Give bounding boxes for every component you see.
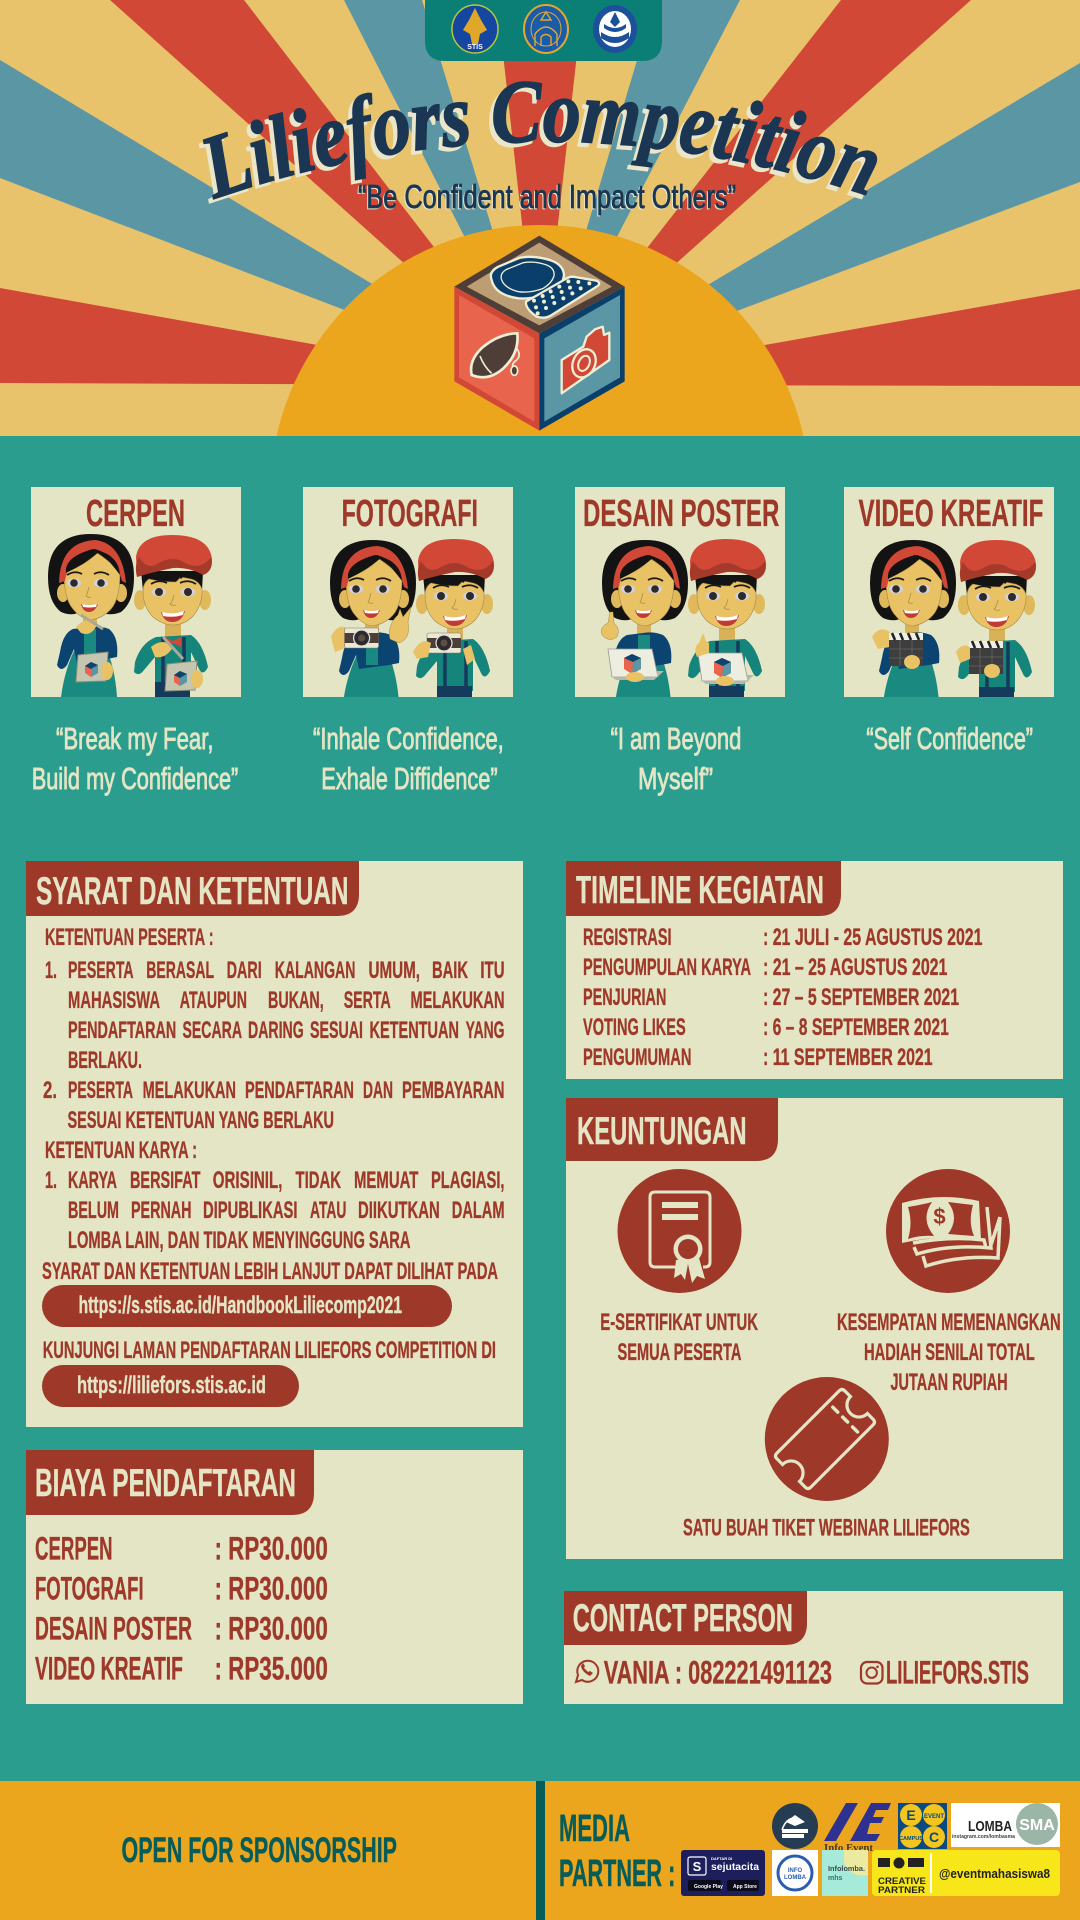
heading tab: timeline <box>566 861 841 916</box>
text block: ketentuan karya: MEMUAT <box>354 1167 418 1194</box>
text block: ketentuan karya: LOMBA LAIN, DAN TIDAK MENYINGGUNG SARA <box>68 1227 411 1254</box>
panel: contact person <box>564 1591 1063 1704</box>
link pill: handbook <box>42 1285 452 1327</box>
timeline table: VOTING LIKES <box>583 1014 686 1041</box>
text block: ketentuan karya <box>45 1137 504 1254</box>
logo: infolomba mhs: Infolomba. <box>828 1866 865 1873</box>
quote: desain poster: “I am Beyond <box>611 721 741 756</box>
text block: ketentuan peserta: BERLAKU. <box>68 1047 142 1074</box>
illustration: photographers <box>330 539 494 697</box>
logo: infolomba mhs <box>822 1850 868 1896</box>
text block: ketentuan peserta: 1. <box>45 957 57 984</box>
logo: creative partner <box>872 1850 1060 1896</box>
logo: creative partner: CREATIVE <box>878 1876 926 1887</box>
heading: cerpen: CERPEN <box>86 493 185 535</box>
panel: cerpen card <box>31 487 241 698</box>
text block: ketentuan peserta: SERTA <box>344 987 391 1014</box>
timeline table: : 27 – 5 SEPTEMBER 2021 <box>763 984 959 1011</box>
panel: timeline kegiatan <box>566 861 1063 1079</box>
logo: info lomba: INFO <box>788 1868 802 1874</box>
heading tab: biaya pendaftaran <box>26 1450 314 1515</box>
timeline table <box>583 924 982 1071</box>
text block: ketentuan peserta: DARI <box>227 957 262 984</box>
heading tab: timeline: TIMELINE KEGIATAN <box>576 869 824 912</box>
text: e-sertifikat: SEMUA PESERTA <box>618 1339 742 1366</box>
text: sponsorship: OPEN FOR SPONSORSHIP <box>122 1830 397 1870</box>
timeline table: : 11 SEPTEMBER 2021 <box>763 1044 933 1071</box>
text block: ketentuan karya: ATAU <box>310 1197 346 1224</box>
text block: ketentuan peserta: DAN <box>363 1077 393 1104</box>
text block: ketentuan peserta: KALANGAN <box>275 957 355 984</box>
title: Liliefors Competition <box>198 81 878 204</box>
timeline table: REGISTRASI <box>583 924 672 951</box>
logo: sejutacita: Google Play <box>694 1884 723 1890</box>
icon: money: $ <box>933 1204 946 1229</box>
text block: ketentuan karya: KARYA <box>68 1167 117 1194</box>
heading tab: biaya pendaftaran: BIAYA PENDAFTARAN <box>35 1462 296 1505</box>
text block: ketentuan peserta: PENDAFTARAN <box>68 1017 176 1044</box>
panel: syarat dan ketentuan <box>26 861 523 1427</box>
quote: fotografi <box>313 721 504 796</box>
logo: event campus: C <box>929 1829 939 1845</box>
quote: cerpen: “Break my Fear, <box>56 721 214 756</box>
quote: fotografi: “Inhale Confidence, <box>313 721 504 756</box>
panel: video kreatif card <box>844 487 1054 703</box>
text block: ketentuan karya: KETENTUAN KARYA : <box>45 1137 197 1164</box>
quote: fotografi: Exhale Diffidence” <box>321 761 498 796</box>
fee table: CERPEN <box>35 1530 113 1566</box>
text block: ketentuan peserta: DARING <box>248 1017 304 1044</box>
text block: ketentuan karya: ORISINIL, <box>213 1167 282 1194</box>
text: media partner: MEDIA <box>559 1808 630 1850</box>
logo: info lomba <box>772 1850 818 1896</box>
logo: creative partner: @eventmahasiswa8 <box>939 1866 1050 1881</box>
logo: info lomba beasiswa <box>772 1803 818 1849</box>
logo: event campus: E <box>906 1807 916 1823</box>
text: e-sertifikat: E-SERTIFIKAT UNTUK <box>600 1309 758 1336</box>
text block: ketentuan karya: BELUM <box>68 1197 119 1224</box>
logo: event campus <box>898 1803 947 1849</box>
logo: STIS <box>452 5 498 53</box>
logo: lomba sma: SMA <box>1019 1817 1055 1834</box>
text block: ketentuan karya: PLAGIASI, <box>431 1167 504 1194</box>
text block: ketentuan peserta: PEMBAYARAN <box>402 1077 504 1104</box>
panel: fotografi card <box>303 487 513 703</box>
text block: ketentuan peserta: BUKAN, <box>268 987 324 1014</box>
logo: media emblem <box>593 5 637 53</box>
timeline table: PENGUMUMAN <box>583 1044 692 1071</box>
logo: sejutacita <box>681 1850 765 1896</box>
quote: desain poster <box>611 721 741 796</box>
illustration: writers <box>48 534 212 697</box>
header sunburst <box>0 0 1080 436</box>
illustration: videographers <box>870 540 1036 697</box>
text: handbook note: SYARAT DAN KETENTUAN LEBIH LANJUT DAPAT DILIHAT PADA <box>42 1258 498 1285</box>
text block: ketentuan peserta: UMUM, <box>368 957 420 984</box>
text block: ketentuan peserta: MELAKUKAN <box>410 987 504 1014</box>
text: media partner: PARTNER : <box>559 1853 675 1895</box>
logo bar <box>425 0 662 61</box>
icon: instagram <box>861 1662 882 1684</box>
text block: ketentuan peserta: PESERTA <box>68 1077 133 1104</box>
fee table <box>35 1530 328 1686</box>
text block: ketentuan peserta: BAIK <box>432 957 468 984</box>
logo: campus emblem <box>524 5 568 53</box>
logo: info lomba: LOMBA <box>784 1875 807 1881</box>
text block: ketentuan karya: DALAM <box>452 1197 504 1224</box>
text block: ketentuan peserta <box>43 924 504 1134</box>
icon: whatsapp <box>576 1661 598 1682</box>
link pill: registration: https://liliefors.stis.ac.id <box>77 1372 266 1399</box>
heading tab: syarat dan ketentuan: SYARAT DAN KETENTUAN <box>36 870 348 913</box>
panel: biaya pendaftaran <box>26 1450 523 1704</box>
link pill: handbook: https://s.stis.ac.id/HandbookLiliecomp2021 <box>78 1292 402 1319</box>
heading: fotografi: FOTOGRAFI <box>342 493 478 535</box>
quote: cerpen: Build my Confidence” <box>32 761 238 796</box>
logo: STIS: STIS <box>467 44 483 51</box>
heading tab: keuntungan <box>566 1098 778 1161</box>
heading tab: syarat dan ketentuan <box>26 861 359 916</box>
logo: sejutacita: S <box>693 1859 702 1874</box>
tagline: “Be Confident and Impact Others” <box>358 178 736 215</box>
logo: lomba sma: instagram.com/lombasma <box>952 1834 1015 1840</box>
text block: ketentuan peserta: MAHASISWA <box>68 987 160 1014</box>
logo: event campus: CAMPUS <box>899 1836 923 1842</box>
text: contact phone: VANIA : 082221491123 <box>604 1654 832 1690</box>
quote: cerpen <box>32 721 238 796</box>
heading: desain poster: DESAIN POSTER <box>583 493 779 535</box>
fee table: : RP30.000 <box>214 1610 328 1646</box>
illustration: designers <box>601 539 766 697</box>
icon: ticket <box>765 1377 889 1501</box>
icon: certificate <box>618 1169 742 1293</box>
logo: info event <box>824 1803 891 1854</box>
text block: ketentuan karya: DIIKUTKAN <box>358 1197 440 1224</box>
text block: ketentuan peserta: KETENTUAN <box>370 1017 459 1044</box>
icon: cube <box>454 236 625 431</box>
panel: desain poster card <box>575 487 785 703</box>
logo: event campus: EVENT <box>924 1814 944 1820</box>
text block: ketentuan peserta: SESUAI <box>310 1017 363 1044</box>
text block: ketentuan peserta: SESUAI KETENTUAN YANG BERLAKU <box>68 1107 334 1134</box>
heading tab: keuntungan: KEUNTUNGAN <box>577 1110 747 1153</box>
text: hadiah <box>837 1309 1061 1396</box>
fee table: VIDEO KREATIF <box>35 1650 183 1686</box>
logo: info event: Info Event <box>824 1843 874 1854</box>
fee table: DESAIN POSTER <box>35 1610 192 1646</box>
text: registration note: KUNJUNGI LAMAN PENDAFTARAN LILIEFORS COMPETITION DI <box>43 1337 496 1364</box>
footer band <box>0 1781 1080 1920</box>
timeline table: : 6 – 8 SEPTEMBER 2021 <box>763 1014 949 1041</box>
logo: creative partner: PARTNER <box>878 1885 925 1896</box>
fee table: : RP30.000 <box>214 1530 328 1566</box>
text: media partner <box>559 1808 675 1895</box>
quote: desain poster: Myself” <box>638 761 713 796</box>
text block: ketentuan peserta: PENDAFTARAN <box>245 1077 354 1104</box>
logo: sejutacita: App Store <box>733 1884 757 1890</box>
timeline table: PENGUMPULAN KARYA <box>583 954 751 981</box>
text block: ketentuan peserta: PESERTA <box>68 957 134 984</box>
text block: ketentuan peserta: MELAKUKAN <box>143 1077 236 1104</box>
text block: ketentuan peserta: KETENTUAN PESERTA : <box>45 924 214 951</box>
logo: sejutacita: DAFTAR DI <box>711 1856 732 1861</box>
text block: ketentuan peserta: 2. <box>43 1077 57 1104</box>
heading tab: contact person: CONTACT PERSON <box>573 1597 793 1640</box>
text block: ketentuan karya: 1. <box>45 1167 57 1194</box>
fee table: : RP30.000 <box>214 1570 328 1606</box>
text block: ketentuan peserta: ITU <box>480 957 504 984</box>
text block: ketentuan peserta: BERASAL <box>146 957 214 984</box>
panel: keuntungan <box>566 1098 1063 1559</box>
fee table: FOTOGRAFI <box>35 1570 144 1606</box>
heading tab: contact person <box>564 1591 807 1645</box>
icon: money <box>886 1169 1010 1293</box>
text block: ketentuan karya: DIPUBLIKASI <box>203 1197 298 1224</box>
text block: ketentuan peserta: YANG <box>466 1017 504 1044</box>
link pill: registration <box>42 1365 299 1407</box>
logo: sejutacita: sejutacita <box>711 1862 759 1873</box>
timeline table: : 21 – 25 AGUSTUS 2021 <box>763 954 947 981</box>
fee table: : RP35.000 <box>214 1650 328 1686</box>
logo: lomba sma <box>951 1803 1060 1847</box>
text block: ketentuan karya: PERNAH <box>131 1197 192 1224</box>
logo: lomba sma: LOMBA <box>968 1818 1012 1835</box>
text block: ketentuan peserta: SECARA <box>182 1017 242 1044</box>
text: e-sertifikat <box>600 1309 758 1366</box>
logo: infolomba mhs: mhs <box>828 1875 842 1882</box>
text block: ketentuan peserta: ATAUPUN <box>180 987 247 1014</box>
text block: ketentuan karya: TIDAK <box>296 1167 341 1194</box>
text block: ketentuan karya: BERSIFAT <box>130 1167 200 1194</box>
timeline table: PENJURIAN <box>583 984 666 1011</box>
